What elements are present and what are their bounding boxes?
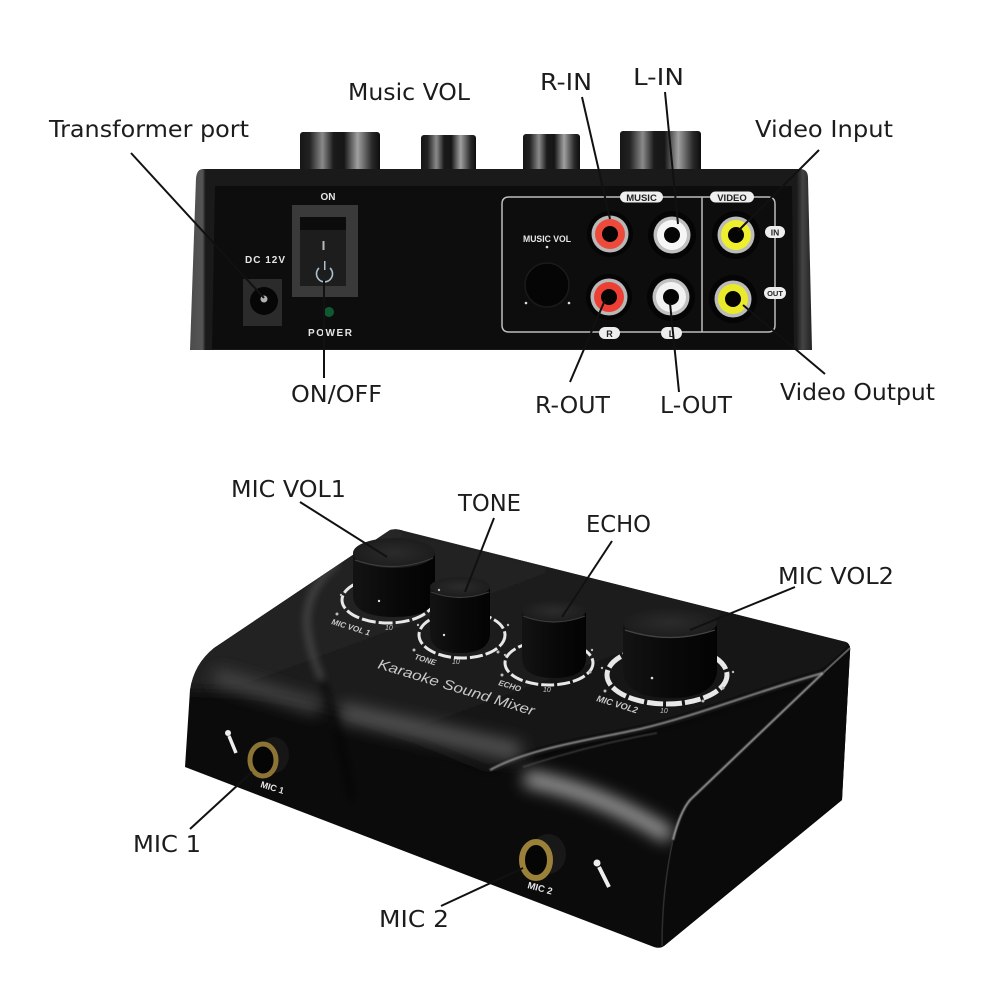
scale ring: MIC VOL1	[342, 577, 434, 623]
scale 10 marks	[385, 625, 668, 715]
RCA L-OUT	[647, 273, 695, 321]
leader lines	[131, 92, 825, 906]
top right edge highlight	[823, 648, 850, 673]
right edge highlight lower	[662, 840, 673, 946]
right edge highlight upper	[673, 673, 823, 840]
label: MIC 2: MIC 2	[379, 907, 449, 933]
R badge	[599, 327, 620, 339]
left front highlight band	[215, 676, 320, 708]
MIC 2 print: MIC 2	[526, 880, 554, 897]
MIC VOL 1 print: MIC VOL 1	[330, 617, 372, 638]
power label: POWER	[308, 328, 353, 339]
top surface	[180, 520, 860, 770]
label: Video Output: Video Output	[780, 380, 935, 406]
rear housing	[190, 169, 812, 350]
label: MIC 1: MIC 1	[133, 832, 201, 858]
IN badge	[765, 226, 785, 238]
knob: ECHO	[522, 600, 586, 678]
panel: rear view of mixer	[190, 131, 812, 350]
jack: MIC 1	[250, 737, 289, 776]
label: R-OUT: R-OUT	[535, 393, 611, 419]
swoosh highlight	[490, 673, 823, 770]
music volume label: MUSIC VOL	[523, 234, 571, 245]
label: ECHO: ECHO	[586, 512, 651, 538]
VIDEO badge: VIDEO	[717, 193, 747, 204]
RCA L-IN	[648, 211, 696, 259]
rear plate	[212, 186, 794, 349]
RCA video in	[712, 211, 760, 259]
icon: microphone 1	[225, 730, 236, 753]
faint lower swoosh	[523, 733, 657, 767]
MUSIC badge	[620, 192, 663, 204]
scale 10 marks: 10	[543, 687, 551, 694]
switch label: ON	[320, 192, 336, 203]
left crease highlight	[307, 563, 337, 680]
R badge: R	[606, 329, 613, 339]
label: L-OUT: L-OUT	[660, 393, 733, 419]
rear knob 3	[523, 134, 580, 172]
connector panel outline	[502, 197, 775, 332]
scale tick dots	[336, 589, 734, 702]
label: Music VOL: Music VOL	[348, 80, 470, 106]
ECHO print: ECHO	[497, 678, 523, 694]
IN badge: IN	[771, 228, 779, 238]
rear knob 4	[620, 131, 701, 172]
MIC VOL2 print: MIC VOL2	[595, 693, 639, 715]
right side face	[663, 645, 850, 950]
label: Transformer port: Transformer port	[48, 117, 249, 143]
body shading	[180, 520, 860, 950]
RCA R-IN	[587, 211, 633, 257]
jack: MIC 2	[522, 834, 566, 878]
OUT badge: OUT	[767, 289, 783, 298]
scale 10 marks: 10	[452, 659, 460, 666]
scale 10 marks: 10	[385, 625, 393, 632]
TONE print: TONE	[413, 652, 438, 668]
icon: microphone 2	[594, 860, 609, 887]
label: ON/OFF: ON/OFF	[291, 382, 382, 408]
label: Video Input: Video Input	[755, 117, 893, 143]
music volume knob	[525, 246, 570, 307]
MIC 1 print: MIC 1	[259, 779, 285, 796]
label: L-IN: L-IN	[633, 65, 684, 91]
DC jack label: DC 12V	[245, 255, 285, 266]
dark crease stripe	[322, 685, 338, 718]
panel: front view of mixer	[180, 520, 860, 950]
scale ring: MIC VOL2	[607, 646, 727, 704]
label: R-IN: R-IN	[540, 70, 592, 96]
OUT badge	[764, 287, 786, 299]
centre front highlight band	[340, 712, 520, 752]
DC jack	[243, 279, 282, 326]
label: MIC VOL2: MIC VOL2	[778, 564, 894, 590]
right front highlight band	[525, 778, 670, 836]
rear knob 1	[300, 132, 380, 172]
L badge	[661, 327, 682, 339]
rear knob 2	[421, 135, 476, 172]
knob: MIC VOL1	[353, 538, 435, 617]
label: TONE: TONE	[457, 491, 521, 517]
RCA video out	[709, 275, 757, 323]
knob: MIC VOL2	[623, 608, 717, 698]
scale 10 marks: 10	[660, 708, 668, 715]
product name print: Karaoke Sound Mixer	[376, 656, 538, 719]
VIDEO badge	[710, 192, 754, 204]
L badge: L	[669, 329, 675, 339]
power LED	[324, 307, 334, 317]
scale ring: ECHO	[505, 641, 593, 685]
scale ring: TONE	[419, 612, 505, 658]
power switch	[292, 205, 358, 297]
mixer body silhouette	[185, 529, 850, 948]
knob: TONE	[430, 577, 490, 653]
RCA R-OUT	[586, 274, 632, 320]
label: MIC VOL1: MIC VOL1	[231, 477, 346, 503]
MUSIC badge: MUSIC	[626, 193, 657, 204]
